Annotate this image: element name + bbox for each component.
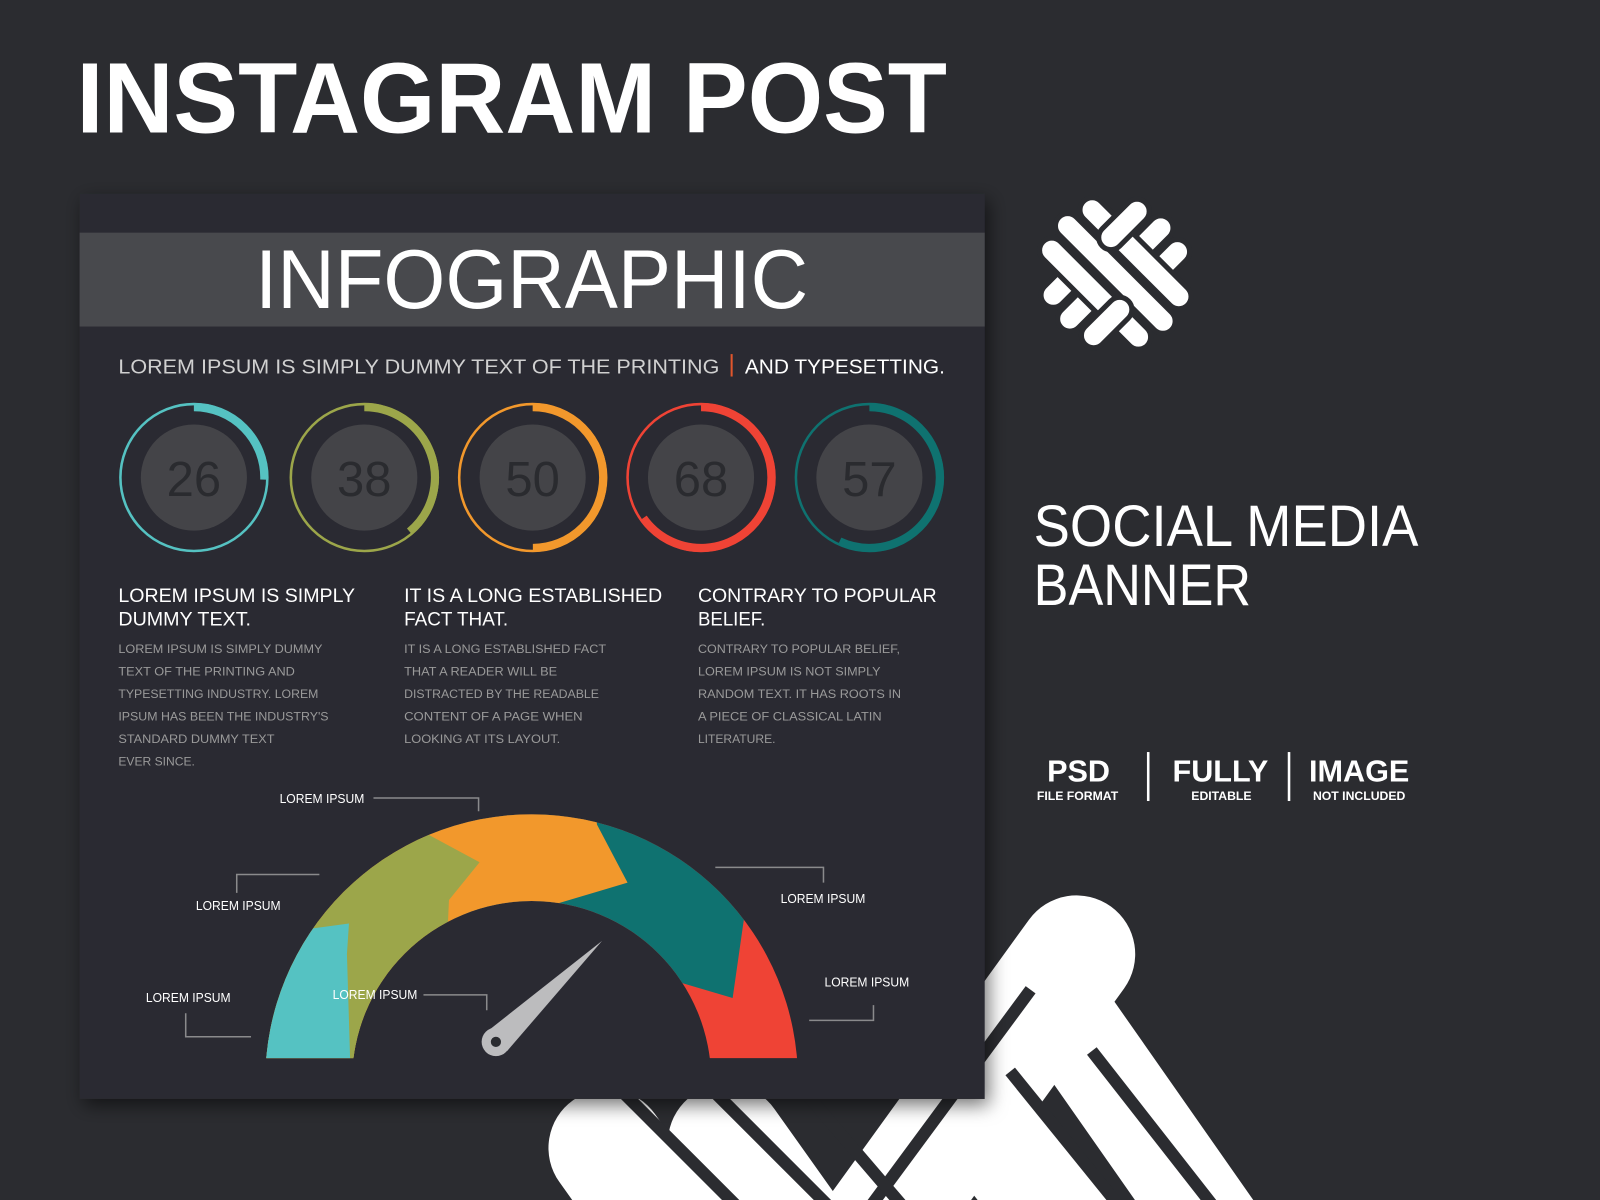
subtitle: AND TYPESETTING.: [745, 356, 945, 378]
gauge labels: LOREM IPSUM: [196, 898, 281, 913]
text block: column 1: LOREM IPSUM IS SIMPLY: [118, 585, 355, 607]
format badges: [1037, 752, 1409, 803]
text block: column 2: IT IS A LONG ESTABLISHED FACT: [404, 642, 607, 656]
text block: column 3: CONTRARY TO POPULAR BELIEF,: [698, 642, 900, 656]
gauge labels: [146, 791, 909, 1005]
format badges: IMAGE: [1309, 755, 1409, 789]
gauge labels: LOREM IPSUM: [824, 975, 909, 990]
gauge labels: LOREM IPSUM: [781, 891, 865, 906]
gauge labels: LOREM IPSUM: [146, 990, 231, 1005]
text block: column 2: CONTENT OF A PAGE WHEN: [404, 709, 583, 723]
text block: column 2: DISTRACTED BY THE READABLE: [404, 687, 599, 701]
format badges: FULLY: [1173, 755, 1268, 789]
title: INSTAGRAM POST: [77, 43, 947, 155]
ring chart: 68: 68: [674, 453, 728, 507]
ring chart: 57: 57: [842, 453, 897, 507]
ring chart: 38: 38: [337, 453, 392, 507]
text block: column 2: LOOKING AT ITS LAYOUT.: [404, 732, 560, 746]
ring chart: 38: [291, 404, 438, 551]
panel: infographic card: [0, 194, 985, 1122]
text block: column 1: STANDARD DUMMY TEXT: [118, 732, 275, 746]
text block: column 3: LOREM IPSUM IS NOT SIMPLY: [698, 665, 881, 679]
text block: column 2: [404, 585, 662, 746]
format badges: FILE FORMAT: [1037, 789, 1119, 803]
text block: column 3: BELIEF.: [698, 609, 765, 631]
gauge labels: LOREM IPSUM: [333, 987, 417, 1002]
heading: INFOGRAPHIC: INFOGRAPHIC: [255, 232, 808, 326]
text block: column 1: LOREM IPSUM IS SIMPLY DUMMY: [118, 642, 322, 656]
gauge needle: [482, 941, 602, 1056]
ring chart: 57: [796, 404, 943, 551]
text block: column 1: IPSUM HAS BEEN THE INDUSTRY'S: [118, 709, 329, 723]
subtitle: [118, 354, 945, 378]
text block: column 2: FACT THAT.: [404, 609, 508, 631]
ring chart: 50: 50: [505, 453, 560, 507]
icon: woven logo: [1005, 163, 1226, 384]
ring chart: 50: [459, 404, 606, 551]
text block: column 3: A PIECE OF CLASSICAL LATIN: [698, 709, 882, 723]
gauge labels: LOREM IPSUM: [280, 791, 364, 806]
heading: social media banner: BANNER: [1034, 553, 1251, 618]
text block: column 3: RANDOM TEXT. IT HAS ROOTS IN: [698, 687, 901, 701]
text block: column 1: TYPESETTING INDUSTRY. LOREM: [118, 687, 318, 701]
format badges: EDITABLE: [1191, 789, 1252, 803]
text block: column 3: CONTRARY TO POPULAR: [698, 585, 937, 607]
gauge chart: [146, 794, 908, 1058]
text block: column 1: EVER SINCE.: [118, 754, 195, 768]
text block: column 1: DUMMY TEXT.: [118, 609, 251, 631]
subtitle: LOREM IPSUM IS SIMPLY DUMMY TEXT OF THE PRINTING: [118, 356, 719, 378]
ring chart: 26: 26: [167, 453, 221, 507]
heading: social media banner: [1034, 494, 1419, 618]
text block: column 3: LITERATURE.: [698, 732, 776, 746]
text block: column 1: TEXT OF THE PRINTING AND: [118, 665, 295, 679]
text block: column 1: [118, 585, 355, 768]
ring chart: 68: [628, 404, 774, 551]
big logo: bottom: [607, 954, 1276, 1200]
format badges: PSD: [1047, 755, 1110, 789]
heading: social media banner: SOCIAL MEDIA: [1034, 494, 1419, 559]
header band: [80, 233, 985, 327]
text block: column 2: IT IS A LONG ESTABLISHED: [404, 585, 662, 607]
ring chart: 26: [120, 404, 267, 551]
text block: column 2: THAT A READER WILL BE: [404, 665, 557, 679]
format badges: NOT INCLUDED: [1313, 789, 1406, 803]
text block: column 3: [698, 585, 937, 746]
